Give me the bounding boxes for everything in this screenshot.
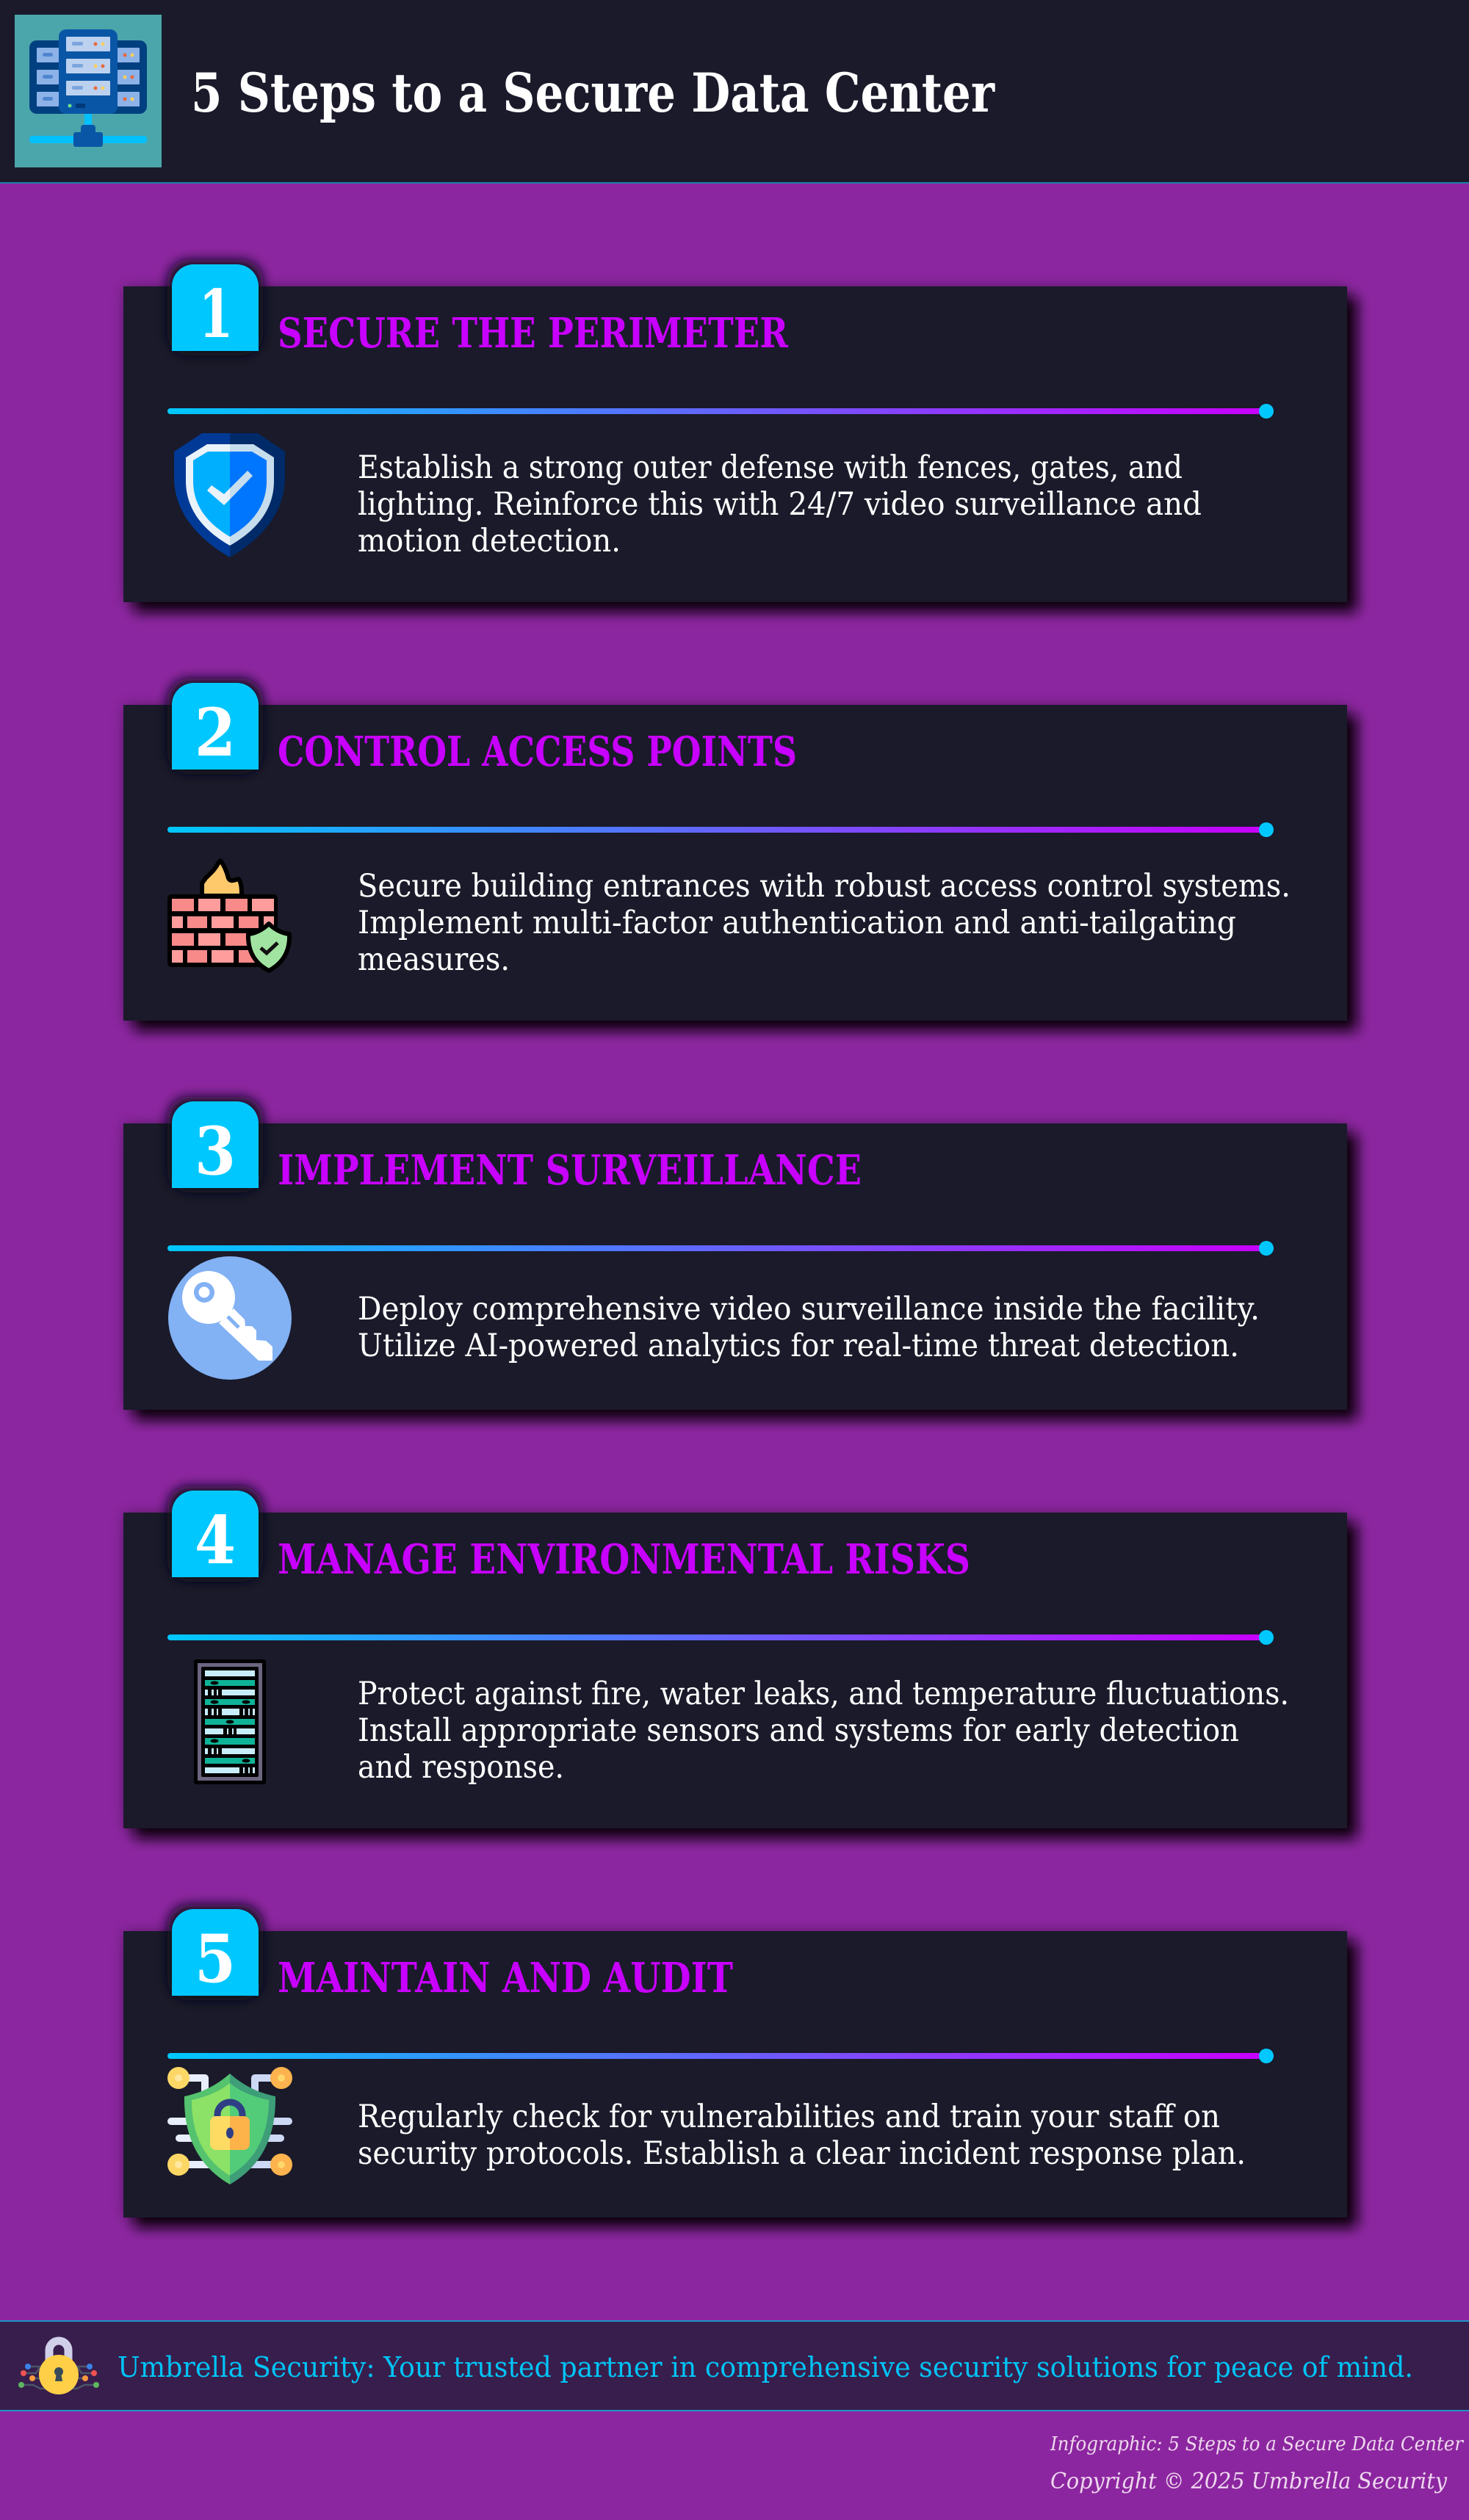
footer credits [1050, 2433, 1464, 2494]
icon: shield lock circuit [167, 2067, 292, 2184]
body text: and response. [358, 1749, 564, 1786]
body text: Deploy comprehensive video surveillance inside the facility. [358, 1291, 1260, 1328]
panel: step 2 [123, 678, 1357, 1031]
body text [358, 1291, 1260, 1364]
icon: padlock circuit [18, 2341, 99, 2394]
body text: Install appropriate sensors and systems for early detection [358, 1712, 1239, 1749]
gradient divider [167, 2049, 1274, 2063]
footer banner [0, 2320, 1469, 2411]
step number 2 [167, 678, 263, 774]
panel: step 5 [123, 1905, 1357, 2228]
body text: measures. [358, 941, 510, 978]
heading: SECURE THE PERIMETER [278, 309, 788, 358]
body text: Protect against fire, water leaks, and temperature fluctuations. [358, 1676, 1289, 1712]
step number 4 [167, 1486, 263, 1582]
gradient divider [167, 1630, 1274, 1645]
body text: lighting. Reinforce this with 24/7 video surveillance and [358, 486, 1202, 523]
heading: CONTROL ACCESS POINTS [278, 728, 797, 776]
icon: blue shield [174, 433, 285, 557]
footer credits: Copyright © 2025 Umbrella Security [1050, 2469, 1448, 2494]
body text [358, 449, 1202, 560]
body text: Establish a strong outer defense with fences, gates, and [358, 449, 1183, 486]
body text: motion detection. [358, 523, 621, 560]
step number 3: 3 [195, 1112, 236, 1190]
title: 5 Steps to a Secure Data Center [191, 62, 995, 125]
heading: IMPLEMENT SURVEILLANCE [278, 1146, 862, 1195]
step number 3 [167, 1097, 263, 1192]
body text: Utilize AI-powered analytics for real-time threat detection. [358, 1328, 1239, 1364]
body text [358, 868, 1291, 978]
header band [0, 0, 1469, 184]
icon: server rack [194, 1659, 266, 1784]
tagline: Umbrella Security: Your trusted partner in comprehensive security solutions for peace of mind. [118, 2351, 1413, 2383]
body text: security protocols. Establish a clear incident response plan. [358, 2135, 1246, 2172]
gradient divider [167, 404, 1274, 419]
step number 1 [167, 260, 263, 355]
gradient divider [167, 822, 1274, 837]
body text: Implement multi-factor authentication and anti-tailgating [358, 905, 1236, 941]
gradient divider [167, 1241, 1274, 1256]
body text: Regularly check for vulnerabilities and train your staff on [358, 2099, 1220, 2135]
heading: MAINTAIN AND AUDIT [278, 1954, 733, 2002]
panel: step 4 [123, 1486, 1357, 1839]
icon: data center servers [15, 15, 162, 167]
icon: firewall [167, 861, 289, 971]
body text [358, 1676, 1289, 1786]
heading: MANAGE ENVIRONMENTAL RISKS [278, 1535, 970, 1584]
icon: key [168, 1256, 292, 1380]
step number 5 [167, 1905, 263, 2000]
panel: step 1 [123, 260, 1357, 612]
body text [358, 2099, 1246, 2172]
body text: Secure building entrances with robust access control systems. [358, 868, 1291, 905]
step number 5: 5 [195, 1920, 236, 1998]
step number 4: 4 [195, 1502, 236, 1579]
step number 2: 2 [195, 694, 236, 772]
step number 1: 1 [198, 275, 234, 353]
panel: step 3 [123, 1097, 1357, 1420]
